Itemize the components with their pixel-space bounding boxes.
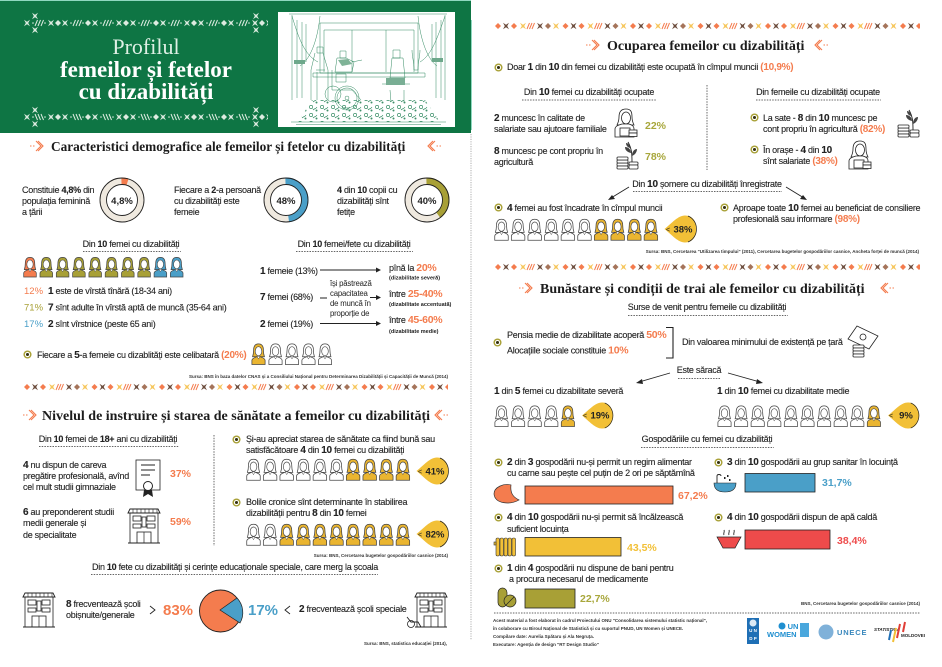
donut: 4.8%: a țării [22, 207, 42, 217]
badge 38%: 38% [673, 224, 693, 236]
education levels [23, 434, 192, 543]
icon: bathtub [714, 474, 736, 492]
logo: Statistica Moldovei [874, 622, 925, 642]
icon: school with wheelchair [407, 593, 447, 628]
column divider [470, 134, 472, 640]
registered unemployed: Din 10 șomere cu dizabilități înregistrate [632, 179, 782, 190]
donut: 4.8%: populația feminină [22, 196, 90, 206]
person icons [718, 406, 881, 426]
badge 82% [416, 520, 448, 548]
education levels: 4 nu dispun de careva [23, 460, 107, 471]
donut: 40%: dizabilități sînt [337, 196, 390, 206]
icon: employee [849, 141, 871, 169]
employment type: 78% [645, 151, 667, 163]
credits: în colaborare cu Biroul Național de Statistică și cu suportul PNUD, UN Women și UNECE. [492, 626, 683, 632]
education levels: 59% [170, 516, 192, 528]
bottom ornament [23, 107, 268, 127]
work capacity diagram: pînă la 20% [389, 262, 437, 274]
chronic illness: dizabilității pentru 8 din 10 femei [246, 508, 367, 519]
age structure: 7 sînt adulte în vîrstă aptă de muncă (35-64 ani) [48, 302, 227, 314]
logo: UN Women [767, 622, 809, 639]
employment rate: Doar 1 din 10 din femei cu dizabilități este ocupată în cîmpul muncii (10,9%) [507, 62, 793, 73]
poverty [494, 365, 919, 429]
badge 41%: < [418, 469, 422, 476]
age structure: 17% [24, 319, 44, 330]
title: Profilul [112, 34, 180, 59]
employment type: 22% [645, 120, 667, 132]
education levels: pregătire profesională, avînd [23, 471, 129, 481]
work capacity diagram: de muncă în [330, 299, 371, 308]
work capacity diagram: (dizabilitate medie) [389, 329, 439, 335]
bar: sanitary group: 3 din 10 gospodării au grup sanitar în locuință [727, 457, 898, 468]
work capacity diagram: (dizabilitate accentuată) [389, 302, 452, 308]
employment type: salariate sau ajutoare familiale [494, 124, 607, 134]
badge 38%: < [666, 227, 670, 234]
employment type: agricultură [494, 157, 533, 167]
school attendance: 17% [248, 602, 278, 619]
education levels: 6 au preponderent studii [23, 507, 114, 518]
village and city employment [750, 87, 919, 169]
donut: 48%: 48% [276, 196, 296, 207]
employment type: 8 muncesc pe cont propriu în [494, 146, 603, 157]
person icons row [24, 257, 183, 277]
source note: Sursa: BNS în baza datelor CNAS și a Consiliului Național pentru Determinarea Dizabilității și Capacității de Muncă (2014) [189, 374, 448, 380]
self-assessed health: satisfăcătoare 4 din 10 femei cu dizabilități [246, 445, 404, 456]
work capacity diagram: 1 femeie (13%) [260, 266, 318, 277]
age structure: 71% [24, 302, 44, 314]
logo: UNDP [747, 618, 759, 644]
education levels: de specialitate [23, 530, 77, 540]
donut: 48% [174, 178, 308, 222]
bar: medicine: 22,7% [580, 593, 610, 605]
village and city employment: sînt salariate (38%) [763, 156, 838, 167]
icon: radiator [494, 538, 516, 556]
school attendance: 83% [163, 602, 193, 619]
credits: Acest material a fost elaborat în cadrul Proiectului ONU "Consolidarea sistemului statistic național", [493, 618, 707, 624]
badge 19%: < [583, 413, 587, 420]
work capacity diagram: capacitatea [330, 289, 369, 298]
village and city employment: În orașe - 4 din 10 [762, 145, 833, 156]
work capacity diagram: între 45-60% [388, 314, 443, 326]
marital status callout: Fiecare a 5-a femeie cu dizablități este celibatară (20%) [37, 350, 246, 361]
households subheading: Gospodăriile cu femei cu dizabilități [642, 434, 773, 444]
marital status callout [23, 344, 332, 364]
income sources [493, 302, 878, 358]
person icons [495, 219, 658, 240]
donut: 40% [337, 178, 449, 222]
source note: Sursa: BNS, statistica educației (2014), [364, 641, 447, 647]
school attendance: 8 frecventează școli [66, 599, 141, 610]
heading: employment: Ocuparea femeilor cu dizabilități [607, 39, 805, 54]
village and city employment: Din femeile cu dizabilități ocupate [756, 87, 880, 97]
badge 41% [416, 458, 448, 484]
person icons [247, 459, 410, 480]
icon: employee [615, 109, 637, 137]
age structure [24, 239, 227, 330]
donut: 4.8% [22, 178, 144, 222]
bar: medicine: a procura necesarul de medicamente [509, 574, 648, 584]
self-assessed health [232, 434, 448, 484]
badge 19%: 19% [590, 410, 610, 422]
bar: medicine: 1 din 4 gospodării nu dispune de bani pentru [507, 563, 674, 574]
icon: school building [128, 509, 160, 543]
title: cu dizabilități [79, 79, 214, 105]
donut: 4.8%: Constituie 4,8% din [22, 185, 95, 195]
heading: education and health: Nivelul de instruire și starea de sănătate a femeilor cu dizabilități [42, 409, 430, 424]
self-assessed health: Și-au apreciat starea de sănătate ca fiind bună sau [246, 434, 435, 444]
chronic illness: Bolile cronice sînt determinante în stabilirea [246, 497, 407, 507]
bar: hot water: 4 din 10 gospodării dispun de apă caldă [727, 512, 877, 523]
heading: welfare: Bunăstare și condiții de trai ale femeilor cu dizabilități [540, 282, 865, 297]
bar: sanitary group: 31,7% [822, 477, 852, 489]
source note: Sursa: BNS, Cercetarea bugetelor gospodăriilor casnice (2014) [314, 553, 449, 558]
donut: 48%: Fiecare a 2-a persoană [174, 185, 261, 195]
bar: sanitary group [714, 457, 898, 492]
badge 19% [582, 402, 613, 429]
person icons [495, 406, 575, 426]
employment type: 2 muncesc în calitate de [494, 113, 585, 124]
bar: hot water: 38,4% [837, 535, 867, 547]
donut: 40%: fetițe [337, 207, 355, 217]
work capacity diagram: 7 femei (68%) [260, 292, 313, 303]
school attendance: obișnuite/generale [66, 610, 135, 620]
icon: basin [717, 530, 741, 548]
registered unemployed: 4 femei au fost încadrate în cîmpul muncii [507, 203, 663, 214]
poverty: 1 din 5 femei cu dizabilitate severă [494, 386, 623, 397]
work capacity diagram: (dizabilitate severă) [389, 276, 440, 282]
badge 9%: 9% [899, 410, 913, 422]
bar: heating [494, 512, 683, 556]
logo: UNDP: U N [749, 628, 757, 633]
education levels: cel mult studii gimnaziale [23, 482, 116, 492]
header banner [0, 1, 471, 133]
school attendance [23, 562, 447, 632]
logo: UNDP: D P [749, 636, 757, 641]
donut: 48%: cu dizabilități este [174, 196, 240, 206]
title: femeilor și fetelor [60, 57, 232, 83]
badge 41%: 41% [425, 466, 445, 478]
icon: pills [498, 588, 516, 607]
credits: Executare: Agenția de design "RT Design Studio" [493, 642, 599, 648]
work capacity diagram: între 25-40% [388, 288, 443, 300]
employment type: Din 10 femei cu dizabilități ocupate [524, 87, 654, 98]
income sources: Surse de venit pentru femeile cu dizabilități [628, 302, 787, 312]
registered unemployed: profesională sau informare (98%) [733, 214, 860, 225]
donut: 40%: 40% [417, 196, 437, 207]
employment type [494, 87, 667, 169]
icon: meat [494, 484, 519, 503]
age structure: 2 sînt vîrstnice (peste 65 ani) [48, 319, 156, 330]
bar: hot water [714, 512, 877, 549]
poverty: 1 din 10 femei cu dizabilitate medie [717, 386, 849, 397]
bar: meat or fish: 67,2% [678, 490, 708, 502]
work capacity diagram: Din 10 femei/fete cu dizabilități [298, 239, 411, 249]
bar: medicine [494, 563, 674, 608]
donut: 40%: 4 din 10 copii cu [337, 185, 398, 195]
income sources: Din valoarea minimului de existență pe țară [682, 337, 843, 347]
badge 9%: < [889, 413, 893, 420]
education levels: 37% [170, 468, 192, 480]
age structure: Din 10 femei cu dizabilități [83, 239, 180, 249]
work capacity diagram: 2 femei (19%) [260, 319, 313, 330]
badge 82%: 82% [425, 530, 445, 540]
donut: 4.8%: 4,8% [111, 196, 133, 207]
logo: Statistica Moldovei: MOLDOVEI [901, 633, 925, 638]
work capacity diagram [260, 239, 452, 335]
person icons [252, 344, 332, 364]
work capacity diagram: proporție de [330, 309, 369, 318]
logo: UNECE [818, 624, 867, 640]
credits: Compilare date: Aurelia Spătaru și Ala Negruța. [493, 634, 594, 640]
heading: demographic characteristics: Caracteristici demografice ale femeilor și fetelor cu dizabilități [51, 139, 406, 155]
age structure: 12% [24, 286, 44, 297]
title [60, 34, 232, 105]
logo: Statistica Moldovei: STATISTICA [874, 627, 900, 632]
village and city employment: La sate - 8 din 10 muncesc pe [763, 113, 877, 124]
bar: heating: suficient locuința [507, 524, 569, 534]
registered unemployed [494, 179, 921, 242]
icon: plant and coins [898, 110, 919, 137]
chronic illness [232, 497, 448, 548]
logo: UN Women: UN [788, 622, 798, 631]
education levels: Din 10 femei de 18+ ani cu dizabilități [39, 434, 178, 444]
source note: Sursa: BNS, Cercetarea "Utilizarea timpului" (2011), Cercetarea bugetelor gospodăriilor casnice, Ancheta forței de muncă (2014) [646, 249, 919, 255]
badge 9% [888, 402, 919, 429]
work capacity diagram: își păstrează [329, 279, 372, 288]
bar: heating: 4 din 10 gospodării nu-și permit să încălzească [507, 512, 683, 523]
illustration: woman in wheelchair at window [278, 12, 455, 127]
age structure: 1 este de vîrstă tînără (18-34 ani) [48, 286, 172, 297]
badge 82%: < [418, 532, 422, 539]
pie chart [200, 590, 243, 632]
person icons [247, 524, 410, 545]
school attendance: Din 10 fete cu dizabilități și cerințe educaționale speciale, care merg la școala [92, 562, 378, 572]
badge 38% [664, 216, 696, 242]
bar: meat or fish: 2 din 3 gospodării nu-și permit un regim alimentar [507, 457, 692, 468]
icon: school [23, 593, 55, 627]
credits [492, 618, 707, 648]
bar: meat or fish [494, 457, 708, 504]
poverty: Este săracă [677, 365, 721, 375]
school attendance: 2 frecventează școli speciale [299, 604, 407, 615]
income sources: Alocațiile sociale constituie 10% [507, 344, 629, 356]
icon: diploma [136, 460, 160, 497]
logo: UN Women: WOMEN [767, 630, 797, 639]
bar: heating: 43,5% [627, 542, 657, 554]
income sources: Pensia medie de dizabilitate acoperă 50% [507, 329, 667, 341]
source note: BNS, Cercetarea bugetelor gospodăriilor casnice (2014) [801, 601, 920, 606]
top ornament [23, 13, 268, 33]
logo: UNECE: UNECE [837, 628, 867, 637]
village and city employment: cont propriu în agricultură (82%) [763, 124, 885, 135]
icon: plant and coins [617, 142, 638, 169]
donut: 48%: femeie [174, 207, 200, 217]
icon: money [848, 326, 878, 357]
registered unemployed: Aproape toate 10 femei au beneficiat de consiliere [733, 203, 921, 214]
education levels: medii generale și [23, 518, 87, 528]
bar: meat or fish: cu carne sau pește cel puțin de 2 ori pe săptămînă [507, 468, 695, 478]
right ornament [494, 21, 920, 31]
